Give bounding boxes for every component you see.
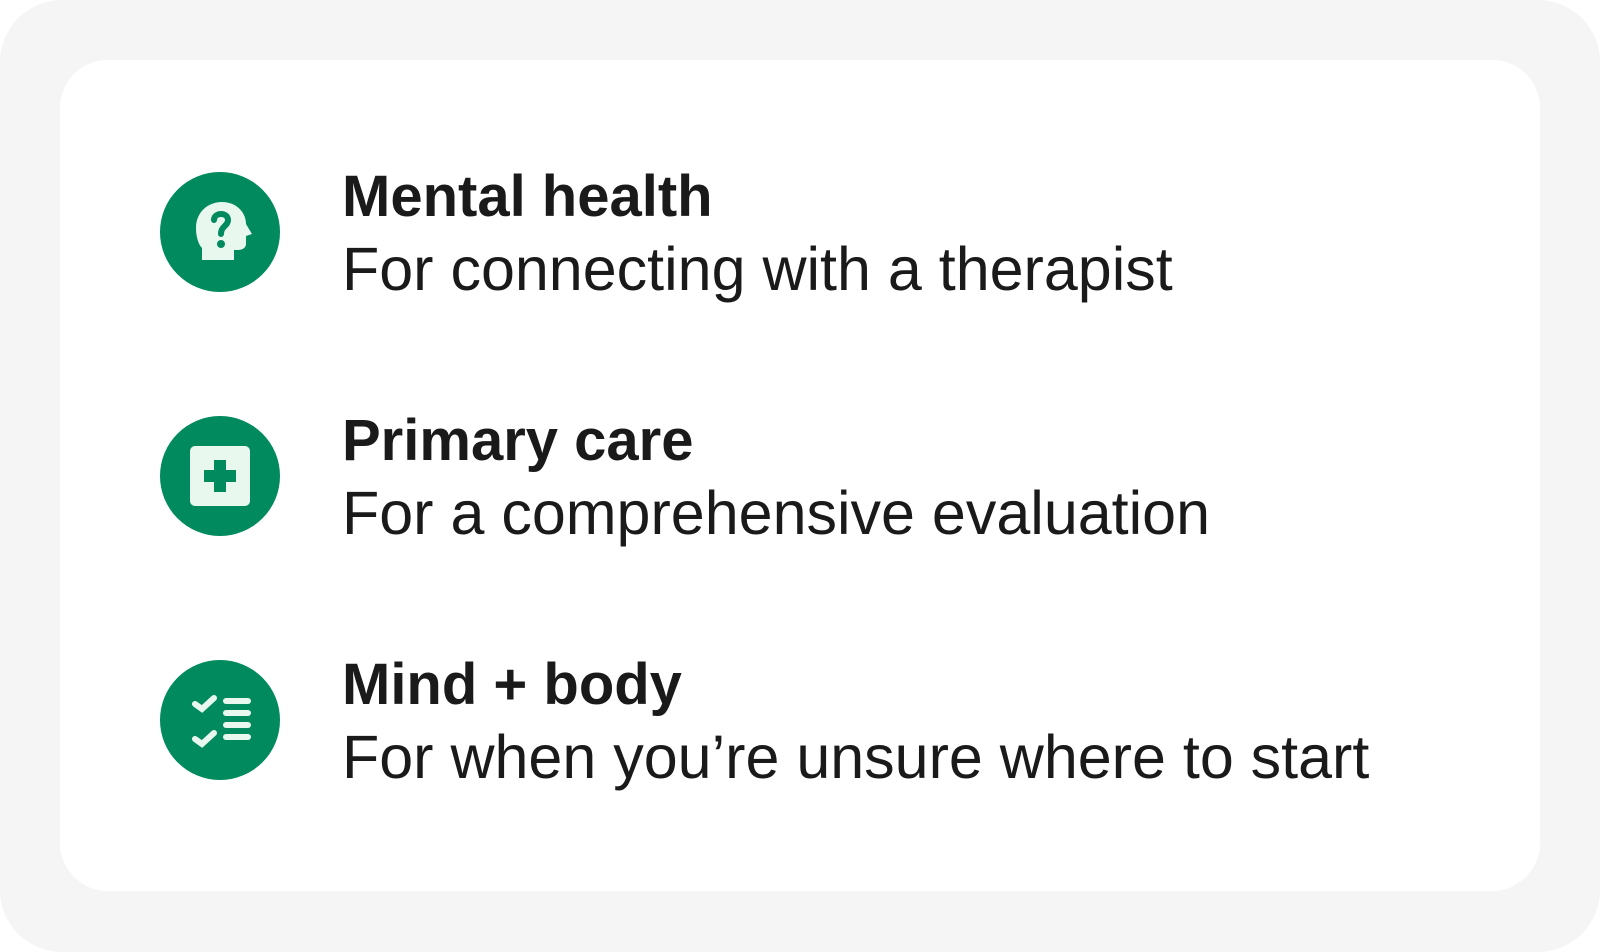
row: primary care bbox=[160, 408, 1210, 547]
icon: checklist bbox=[160, 660, 280, 780]
text: primary care description: For a comprehensive evaluation bbox=[342, 479, 1210, 547]
text: mental health description: For connecting with a therapist bbox=[342, 235, 1173, 303]
icon: medical kit bbox=[160, 416, 280, 536]
text: mind + body description: For when you’re unsure where to start bbox=[342, 723, 1369, 791]
icon: head with question mark bbox=[160, 172, 280, 292]
title: Mind + body: Mind + body bbox=[342, 652, 682, 717]
row: mind + body bbox=[160, 652, 1369, 791]
title: Primary care: Primary care bbox=[342, 408, 693, 473]
row: mental health bbox=[160, 164, 1173, 303]
title: Mental health: Mental health bbox=[342, 164, 713, 229]
